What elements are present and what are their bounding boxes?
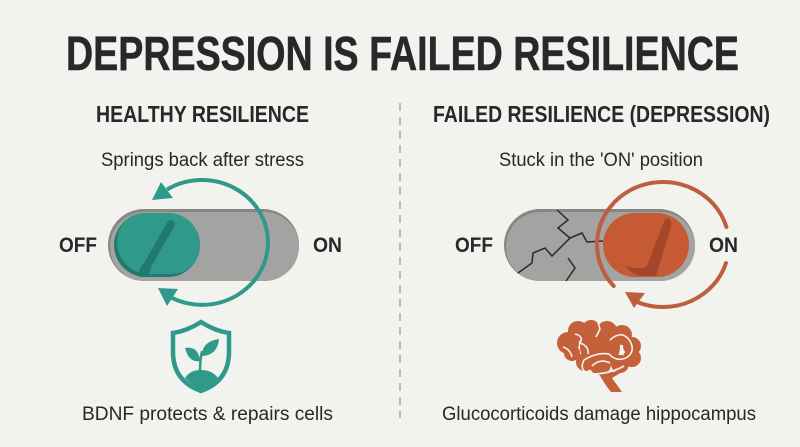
heading: healthy: HEALTHY RESILIENCE (96, 101, 309, 127)
toggle switch: healthy (108, 209, 299, 281)
subheading: healthy: Springs back after stress (101, 150, 304, 171)
label: on: ON (709, 234, 738, 257)
panel: failed resilience (433, 101, 770, 425)
icon: brain (557, 319, 641, 392)
caption: healthy: BDNF protects & repairs cells (82, 404, 333, 425)
icon: shield with sprout (173, 322, 229, 391)
toggle switch: stuck (504, 209, 695, 281)
panel: healthy resilience (59, 101, 342, 425)
cracks (518, 210, 603, 281)
arrow: stuck loop (597, 182, 726, 308)
caption: failed: Glucocorticoids damage hippocampus (442, 404, 756, 425)
arrow: spring back (152, 180, 268, 306)
label: on: ON (313, 234, 342, 257)
infographic (60, 36, 769, 424)
subheading: failed: Stuck in the 'ON' position (499, 150, 703, 171)
label: off: OFF (59, 234, 97, 257)
label: off: OFF (455, 234, 493, 257)
